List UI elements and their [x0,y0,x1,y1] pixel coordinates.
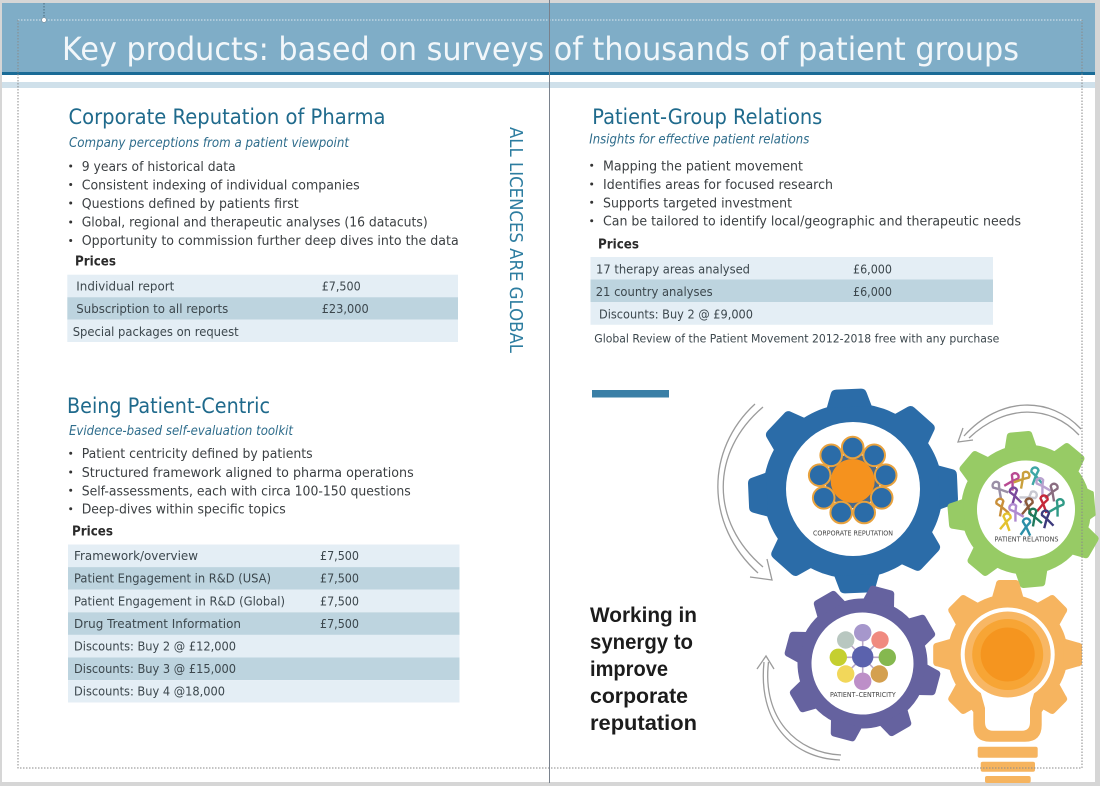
price table: £7,500 [322,278,361,294]
price table: £6,000 [853,284,892,299]
bullet list: Self-assessments, each with circa 100-150 questions [82,483,411,499]
gear: patient centricity [767,568,958,759]
synergy statement [590,604,697,735]
price table: 17 therapy areas analysed [596,261,750,276]
label: PATIENT–CENTRICITY [830,691,897,699]
prices label: Prices [75,254,116,270]
price table: Discounts: Buy 2 @ £9,000 [599,307,753,322]
bullet list: Structured framework aligned to pharma operations [82,465,414,481]
price table: 21 country analyses [596,284,713,299]
title: Key products: based on surveys of thousands of patient groups [62,30,1019,68]
footnote: Global Review of the Patient Movement 2012-2018 free with any purchase [594,332,999,346]
price table: Discounts: Buy 3 @ £15,000 [74,661,236,676]
label: PATIENT RELATIONS [994,536,1058,544]
bullet list [590,158,1021,230]
icon: orange flower [809,437,896,523]
price table: Discounts: Buy 2 @ £12,000 [74,638,236,654]
bullet list: Opportunity to commission further deep dives into the data [82,233,459,249]
price table: Special packages on request [73,324,239,339]
panel: Corporate Reputation of Pharma [67,105,459,342]
bullet list: Consistent indexing of individual companies [82,178,360,194]
side label: all licences are global: ALL LICENCES ARE GLOBAL [505,127,525,353]
prices label: Prices [72,524,113,540]
prices label: Prices [598,236,639,252]
synergy statement: reputation [590,712,697,735]
icon: awareness ribbons [990,467,1066,536]
arrow: top right arc [958,405,1081,442]
bullet list: Mapping the patient movement [603,158,803,174]
synergy statement: Working in [590,604,697,627]
gear: patient relations [941,425,1100,594]
price table: £7,500 [320,616,359,631]
arrow: left arc [718,404,772,580]
bullet list: Supports targeted investment [603,196,792,212]
bullet list [69,159,459,249]
label: CORPORATE REPUTATION [813,530,893,538]
price table: £7,500 [320,548,359,563]
bullet list: Can be tailored to identify local/geographic and therapeutic needs [603,214,1021,230]
price table: £6,000 [853,261,892,276]
price table: Framework/overview [74,548,198,563]
arrow: bottom left arc [757,656,841,760]
price table: Patient Engagement in R&D (USA) [74,571,271,586]
subtitle: Insights for effective patient relations [589,132,809,147]
panel: Patient-Group Relations [589,105,1021,346]
gear: corporate reputation [744,385,962,597]
price table: Discounts: Buy 4 @18,000 [74,684,225,699]
price table [67,275,458,342]
synergy statement: improve [590,658,668,681]
price table: £7,500 [320,594,359,608]
synergy statement: synergy to [590,631,693,654]
price table [590,257,993,325]
bullet list: Patient centricity defined by patients [82,446,313,462]
icon: hub and spokes [830,624,896,690]
subtitle: Company perceptions from a patient viewpoint [69,136,350,151]
price table: £7,500 [320,571,359,586]
accent bar [592,390,669,398]
price table: £23,000 [322,301,369,316]
bullet list: Identifies areas for focused research [603,177,833,193]
price table [68,544,460,702]
bullet list: Global, regional and therapeutic analyses (16 datacuts) [82,214,428,230]
heading: Corporate Reputation of Pharma [68,105,386,129]
heading: Patient-Group Relations [592,105,822,129]
heading: Being Patient-Centric [67,394,270,418]
gear: lightbulb [933,580,1082,783]
price table: Patient Engagement in R&D (Global) [74,594,285,608]
bullet list: Deep-dives within specific topics [82,502,286,518]
header banner [2,3,1095,88]
bullet list: 9 years of historical data [82,159,236,175]
bullet list: Questions defined by patients first [82,196,299,212]
synergy statement: corporate [590,685,688,708]
price table: Individual report [76,278,174,294]
bullet list [69,446,414,518]
price table: Subscription to all reports [76,301,228,316]
panel: Being Patient-Centric [67,394,460,702]
price table: Drug Treatment Information [74,616,241,631]
subtitle: Evidence-based self-evaluation toolkit [69,424,294,439]
